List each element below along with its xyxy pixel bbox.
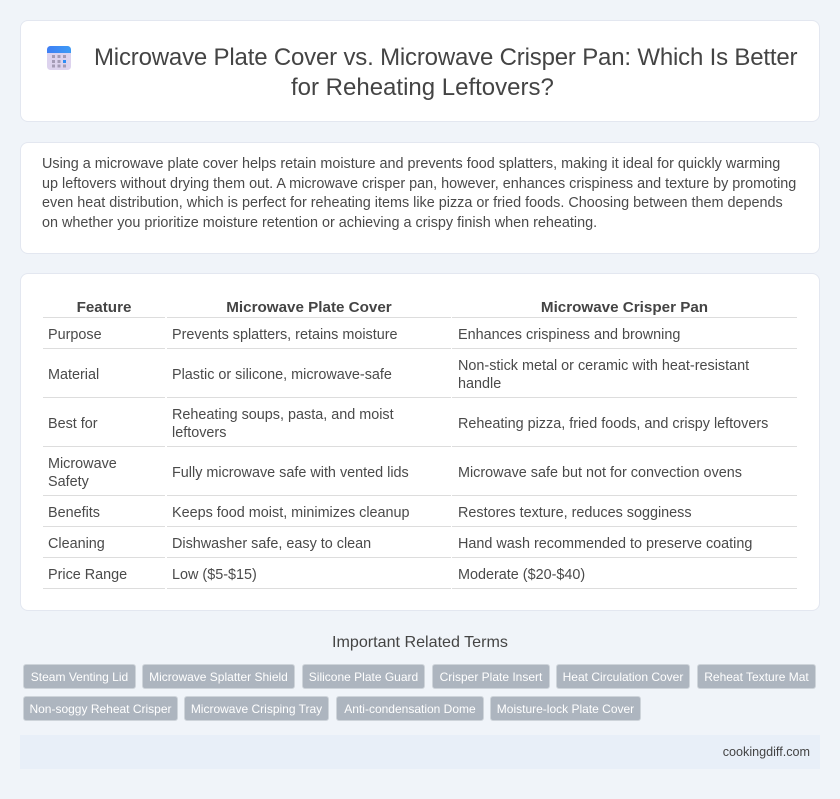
tag: Anti-condensation Dome [344,702,476,716]
text block: introduction: up leftovers without drying them out. A microwave crisper pan, however, enhances crispiness and texture by promoting [42,176,796,192]
title: for Reheating Leftovers? [291,74,554,101]
tag: Crisper Plate Insert [440,670,542,684]
row: cleaning: Dishwasher safe, easy to clean [172,536,371,552]
row: cleaning: Hand wash recommended to preserve coating [458,536,752,552]
row: microwave safety: Safety [48,474,89,490]
row: purpose: Prevents splatters, retains moisture [172,327,398,343]
tag [302,664,425,689]
row: purpose: Purpose [48,327,102,343]
row: best for: leftovers [172,425,226,441]
tag [697,664,816,689]
tag [142,664,295,689]
panel: introduction [20,142,820,254]
tag [184,696,329,721]
row: benefits: Benefits [48,505,100,521]
tag: Microwave Crisping Tray [191,702,322,716]
row: benefits: Keeps food moist, minimizes cleanup [172,505,410,521]
table header: Microwave Crisper Pan [541,299,708,316]
row: best for: Best for [48,416,98,432]
text block: introduction [42,156,796,231]
footer bar [20,735,820,769]
title: Microwave Plate Cover vs. Microwave Crisper Pan: Which Is Better [94,44,797,71]
tag [556,664,690,689]
related terms tags [23,664,816,721]
table header: Microwave Plate Cover [226,299,392,316]
table header: Feature [77,299,131,316]
panel: comparison table [20,273,820,611]
tag: Silicone Plate Guard [309,670,418,684]
table header [43,299,797,318]
row: material: handle [458,376,501,392]
row: microwave safety: Fully microwave safe with vented lids [172,465,409,481]
tag [23,696,178,721]
tag: Steam Venting Lid [31,670,128,684]
tag: Non-soggy Reheat Crisper [29,702,172,716]
text block: introduction: on whether you prioritize moisture retention or achieving a crispy finish when reheating. [42,215,597,231]
row: material: Non-stick metal or ceramic with heat-resistant [458,358,749,374]
panel: title header [20,20,820,122]
tag [336,696,484,721]
title [94,44,798,101]
tag [432,664,550,689]
heading: important related terms: Important Related Terms [332,633,508,651]
row: benefits [43,505,797,527]
text block: introduction: Using a microwave plate cover helps retain moisture and prevents food splatters, making it ideal for quickly warming [42,156,780,172]
row: material [43,358,797,398]
footer source text: cookingdiff.com [723,745,810,759]
row: price range: Low ($5-$15) [172,567,257,583]
row: material: Plastic or silicone, microwave-safe [172,367,392,383]
row: price range: Moderate ($20-$40) [458,567,585,583]
row: microwave safety: Microwave [48,456,117,472]
tag [490,696,641,721]
row: microwave safety [43,456,797,496]
text block: introduction: even heat distribution, which is perfect for reheating items like pizza or fried foods. Choosing between them depends [42,195,783,211]
tag: Reheat Texture Mat [704,670,809,684]
tag: Microwave Splatter Shield [149,670,288,684]
row: best for [43,407,797,447]
row: best for: Reheating pizza, fried foods, and crispy leftovers [458,416,768,432]
tag: Moisture-lock Plate Cover [497,702,634,716]
row: benefits: Restores texture, reduces sogginess [458,505,692,521]
row: price range: Price Range [48,567,127,583]
row: cleaning: Cleaning [48,536,105,552]
tag: Heat Circulation Cover [563,670,683,684]
row: cleaning [43,536,797,558]
row: microwave safety: Microwave safe but not for convection ovens [458,465,742,481]
icon: calendar [47,46,71,70]
tag [23,664,136,689]
row: material: Material [48,367,99,383]
row: purpose [43,327,797,349]
row: purpose: Enhances crispiness and browning [458,327,680,343]
row: best for: Reheating soups, pasta, and moist [172,407,394,423]
row: price range [43,567,797,589]
